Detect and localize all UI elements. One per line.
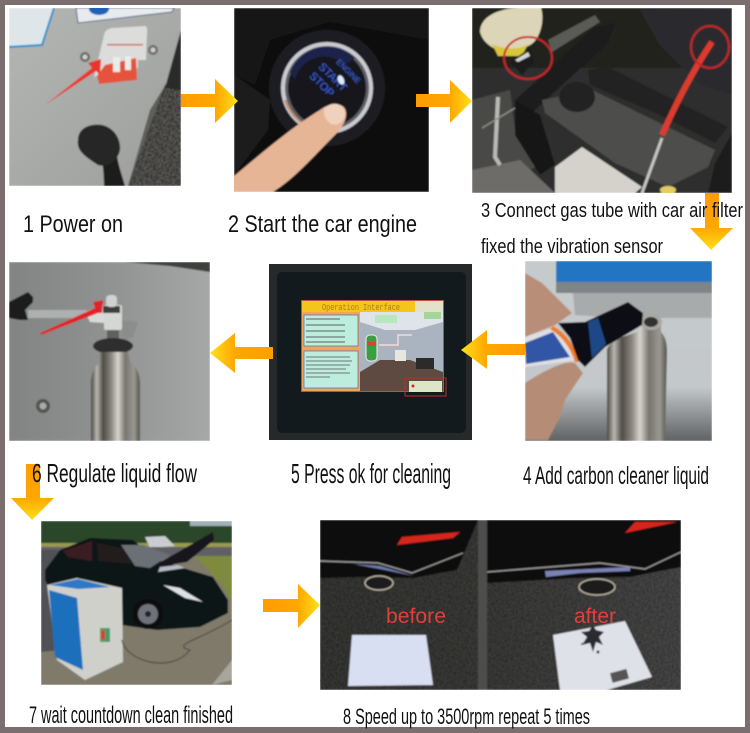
caption: step 5: 5 Press ok for cleaning xyxy=(291,458,451,489)
panel: step 7 car with machine photo xyxy=(41,521,232,685)
arrow: step 6 to 7 xyxy=(11,464,54,520)
caption: step 1: 1 Power on xyxy=(23,211,123,238)
caption: step 7: 7 wait countdown clean finished xyxy=(29,702,233,729)
arrow: step 7 to 8 xyxy=(263,584,320,628)
panel: step 2 engine start button photo: STOP xyxy=(307,70,336,100)
panel: step 4 pouring cleaner photo xyxy=(525,261,712,441)
caption: step 3 line 2: fixed the vibration sensor xyxy=(481,236,663,258)
panel: step 8 before and after exhaust photo xyxy=(320,520,681,690)
panel: step 6 liquid flow regulator photo xyxy=(9,262,210,441)
touch screen interface xyxy=(301,300,444,392)
caption: step 2: 2 Start the car engine xyxy=(228,211,417,238)
label: after: after xyxy=(574,605,616,628)
panel: step 1 power switch photo xyxy=(9,8,181,186)
caption: step 6: 6 Regulate liquid flow xyxy=(32,458,197,488)
arrow: step 3 to 4 xyxy=(690,193,733,250)
touch screen interface: Operation Interface xyxy=(322,302,400,313)
panel: step 2 engine start button photo: START xyxy=(316,61,349,94)
label: before: before xyxy=(386,605,446,628)
panel: step 5 touch screen photo xyxy=(269,264,472,440)
arrow: step 5 to 6 xyxy=(210,333,273,373)
panel: step 3 engine bay photo xyxy=(472,8,732,193)
arrow: step 2 to 3 xyxy=(416,80,472,123)
arrow: step 4 to 5 xyxy=(461,330,525,369)
panel: step 2 engine start button photo xyxy=(234,8,429,192)
caption: step 8: 8 Speed up to 3500rpm repeat 5 times xyxy=(343,704,590,729)
panel: step 2 engine start button photo: ENGINE xyxy=(334,57,362,85)
arrow: step 1 to 2 xyxy=(181,79,238,123)
